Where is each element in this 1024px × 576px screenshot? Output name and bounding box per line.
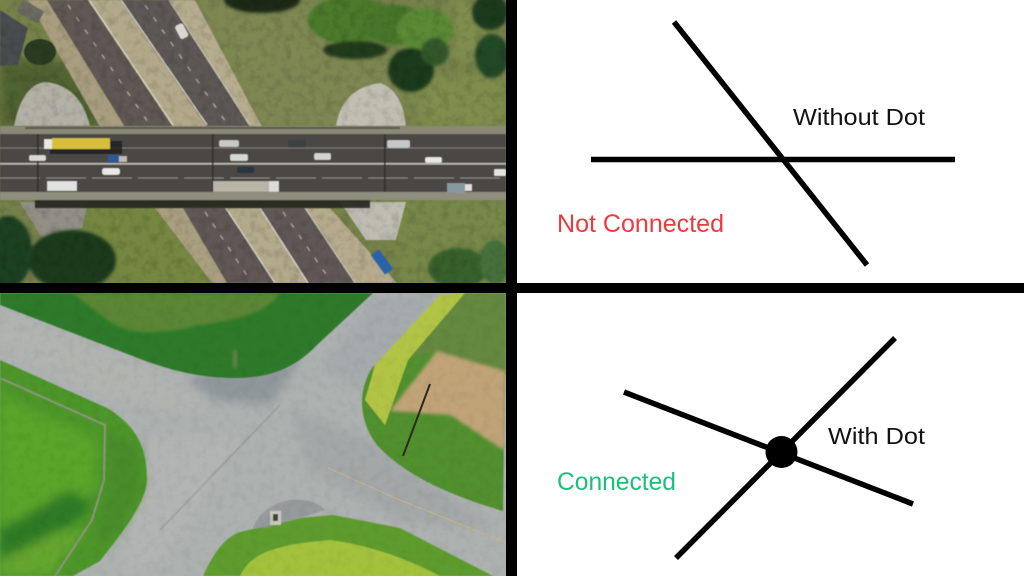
trees lower left bbox=[0, 216, 511, 290]
panel: aerial photo of road intersection bbox=[0, 293, 506, 576]
label: connected: Connected bbox=[557, 468, 676, 496]
overpass bridge bbox=[0, 126, 506, 208]
bare soil patch bbox=[390, 351, 505, 451]
grass: top verge bbox=[0, 293, 373, 378]
grass: left field bbox=[0, 360, 147, 576]
crop field at top bbox=[72, 293, 280, 368]
car on the highway and blue van bbox=[174, 22, 393, 275]
concrete embankments bbox=[14, 82, 406, 240]
divider: vertical black bar bbox=[506, 0, 517, 576]
divider: horizontal black bar bbox=[0, 283, 1024, 293]
panel: aerial photo of highway overpass bbox=[0, 0, 511, 290]
label: with dot: With Dot bbox=[828, 423, 926, 449]
label: without dot: Without Dot bbox=[793, 104, 926, 130]
highway lower section bbox=[155, 208, 397, 283]
drainage inlets bbox=[253, 500, 325, 528]
yellow centre line bbox=[328, 468, 505, 542]
crossing lines without dot bbox=[591, 22, 955, 265]
grass: right field bbox=[362, 293, 506, 511]
trees upper right bbox=[224, 0, 509, 92]
panel: not connected diagram bbox=[557, 22, 955, 265]
blue truck bbox=[108, 155, 127, 162]
label: not connected: Not Connected bbox=[557, 210, 724, 238]
fence along left field bbox=[0, 378, 105, 576]
highway upper section bbox=[28, 0, 262, 127]
grass fields bbox=[0, 0, 506, 283]
road shading bbox=[189, 363, 476, 523]
crossing lines joined by dot bbox=[624, 338, 913, 558]
panel: connected diagram bbox=[557, 338, 926, 558]
yellow truck bbox=[44, 138, 110, 149]
building top left bbox=[0, 0, 56, 66]
crossing road seam bbox=[160, 405, 280, 530]
utility pole bbox=[403, 384, 430, 456]
grass: bottom field bbox=[203, 515, 493, 576]
vehicles on the overpass bbox=[29, 138, 506, 193]
